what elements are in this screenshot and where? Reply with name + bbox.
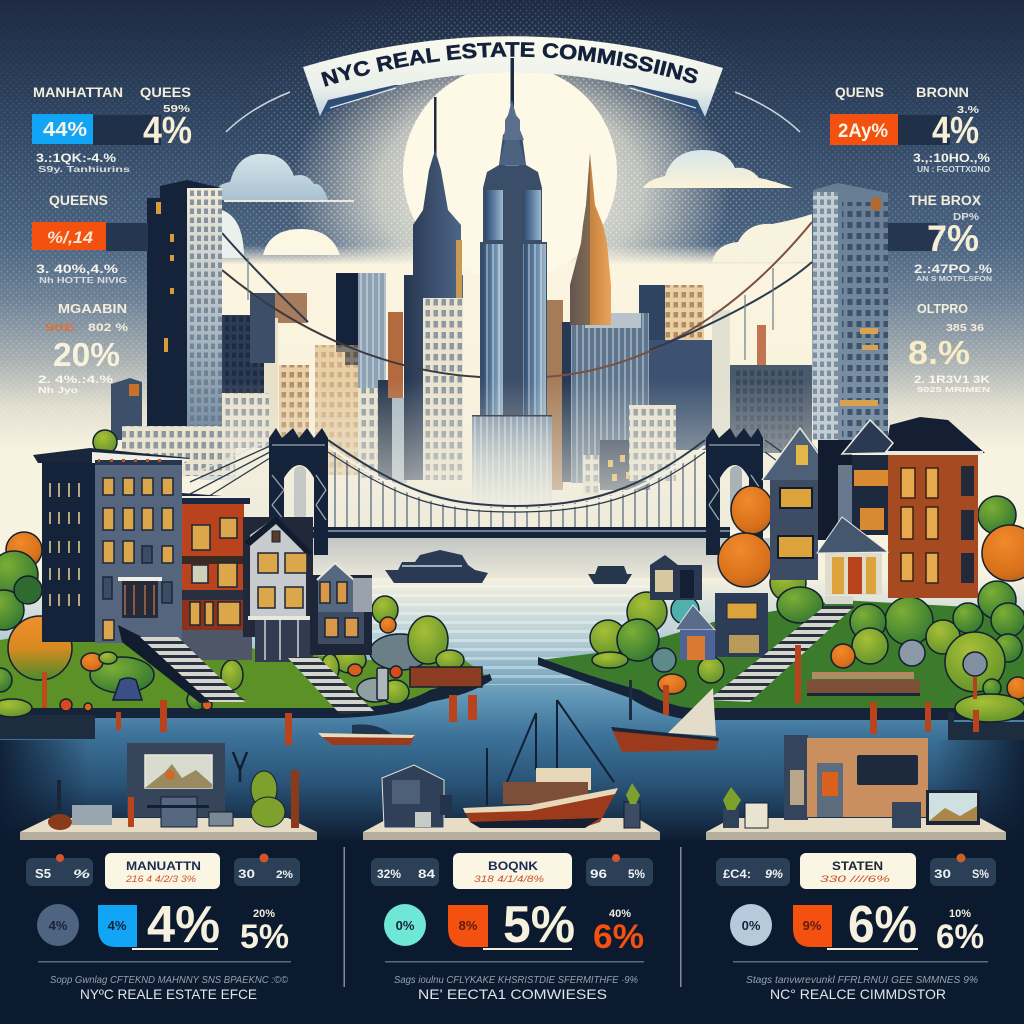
water (0, 578, 1024, 840)
panel: Manhattan: 5% (240, 918, 289, 956)
top-right stats: THE BROX (909, 193, 981, 208)
panel: Staten (680, 847, 996, 1002)
stat chip left (716, 858, 790, 886)
top-right stats: OLTPRO (917, 301, 968, 316)
top-right stats: AN S MOTFLSFON (916, 274, 992, 283)
panel: Bronx: 6% (593, 918, 644, 956)
stat chip left: 32% (377, 867, 401, 881)
left spire tower (404, 97, 463, 480)
panel: Staten: Stags tanvwrevunkl FFRLRNUI GEE SMMNES 9% (746, 974, 978, 986)
borough label card: MANUATTN (126, 859, 201, 873)
shelf right with building (706, 735, 1006, 840)
orange tab: 8% (459, 918, 478, 933)
right houses (650, 417, 985, 702)
top-left stats: 90E (45, 322, 75, 334)
top-left stats: QUEENS (49, 193, 108, 208)
bar: Manhattan (32, 114, 161, 145)
top-left stats: MGAABIN (58, 301, 127, 316)
empire state spire (499, 58, 526, 166)
small house one (650, 555, 702, 600)
left island (0, 620, 492, 739)
shelf middle with boat (363, 700, 660, 840)
panel: Bronx (344, 847, 653, 1002)
stat chip right: S% (972, 867, 989, 881)
blue tab (98, 905, 137, 947)
circle stat: 4% (49, 918, 68, 933)
banner title text: NYC REAL ESTATE COMMISSIINS (321, 42, 698, 87)
stat chip right: 2% (276, 869, 293, 881)
bar: Queens (32, 222, 148, 251)
orange tab (793, 905, 832, 947)
right island (538, 600, 1024, 740)
top-right stats: 5025 MRIMEN (917, 385, 990, 394)
panel: Bronx: Sags ioulnu CFLYKAKE KHSRISTDIE SFERMITHFE ·9% (394, 974, 638, 986)
left dark tower (147, 180, 222, 440)
top-right stats: 3.,:10HO.,% (913, 151, 990, 165)
top-left stats: 802 % (88, 322, 128, 334)
bench (807, 672, 920, 696)
sailboat (611, 688, 719, 752)
panel: Staten: NC° REALCE CIMMDSTOR (770, 986, 946, 1002)
small house two (675, 593, 768, 660)
shelf left with objects (20, 743, 317, 840)
water darkening right (934, 740, 1024, 840)
stat chip right (930, 854, 996, 886)
blue tab: 4% (108, 918, 127, 933)
bar: Queens right: 2Ay% (838, 121, 888, 142)
borough label card: 330 ////6% (820, 874, 890, 884)
stairs one (118, 625, 245, 703)
top-right stats: 8.% (908, 334, 970, 371)
cream sky behind skyline (222, 245, 812, 525)
circle stat (384, 904, 426, 946)
stat chip right (586, 854, 653, 886)
top-left stats (32, 85, 192, 395)
top-left stats: 4% (143, 110, 192, 152)
small boat (318, 724, 415, 745)
small left tower (111, 378, 235, 476)
panel: Manhattan: 20% (253, 908, 275, 920)
trees right (590, 486, 1024, 722)
ferries (385, 550, 632, 584)
stat chip right (234, 854, 300, 886)
stat chip right: 30 (934, 867, 951, 881)
top-right stats: 4% (932, 110, 979, 152)
bridge (190, 428, 800, 580)
suspension cables upper (222, 222, 812, 377)
orange spire tower (570, 153, 611, 325)
top-right stats: 2.:47PO .% (914, 262, 992, 276)
top-left stats: S9y. Tanhiurins (38, 164, 130, 174)
trees left (0, 430, 482, 717)
title banner (303, 36, 723, 117)
right tower (813, 183, 888, 440)
left brownstones (33, 448, 375, 714)
water ripples (370, 585, 660, 685)
stat chip right: 30 (238, 867, 255, 881)
stat chip left: 9% (765, 867, 783, 881)
stat chip left: £C4: (723, 867, 751, 881)
circle stat (730, 904, 772, 946)
stairs two (287, 657, 375, 714)
top-left stats: 3. 40%,4.% (36, 262, 118, 276)
stat chip left: % (73, 867, 91, 881)
circle stat: 0% (742, 918, 761, 933)
top-right stats: 7% (927, 218, 979, 259)
halftone texture (0, 46, 1024, 410)
posts (42, 645, 979, 745)
grey-white house (243, 516, 318, 662)
circle stat (37, 904, 79, 946)
brick mansion (842, 417, 985, 598)
top-right stats: UN : FGOTTXONO (917, 165, 990, 174)
panel: Staten: 6% (936, 918, 984, 956)
top-right stats: 385 36 (946, 322, 984, 334)
dark apartment building (33, 448, 190, 643)
clouds (214, 150, 812, 262)
top-right stats: 2. 1R3V1 3K (914, 374, 990, 386)
background skyline (200, 273, 812, 495)
panel: Manhattan: Sopp Gwnlag CFTEKND MAHNNY SNS BPAEKNC :©© (50, 974, 288, 986)
panel: Manhattan: NYºC REALE ESTATE EFCE (80, 986, 257, 1002)
top-left stats: Nh HOTTE NIVIG (39, 275, 128, 285)
panel: Bronx: NE' EECTA1 COMWIESES (418, 986, 607, 1002)
grey gabled house (762, 428, 852, 580)
sun (403, 65, 617, 279)
panel: Staten: 6% (848, 896, 917, 954)
top-right stats (830, 85, 992, 394)
bar: Bronx (888, 223, 938, 251)
stat chip right: 5% (628, 867, 645, 881)
panel: Bronx: 5% (503, 896, 575, 954)
top-right stats: 3.% (957, 105, 979, 116)
borough label card (105, 853, 220, 889)
stat chip left (26, 854, 93, 886)
top-left stats: Nh Jyo (38, 386, 78, 395)
dark posts (629, 680, 954, 740)
stairs right (708, 606, 855, 702)
stat chip left: 84 (418, 867, 435, 881)
water darkening left (0, 740, 90, 840)
panel: Bronx: 40% (609, 908, 631, 920)
borough label card: BOQNK (488, 859, 538, 873)
empire state tower (472, 125, 552, 505)
borough label card: 318 4/1/4/8% (474, 874, 544, 884)
orange tab: 9% (803, 918, 822, 933)
bar: Manhattan: 44% (43, 119, 87, 141)
stat chip left (371, 858, 439, 886)
orange tab (448, 905, 488, 947)
stat chip left: S5 (35, 866, 51, 881)
top-left stats: 20% (53, 336, 120, 373)
borough label card: 216 4 4/2/3 3% (125, 874, 196, 884)
panel: Manhattan: 4% (147, 896, 220, 954)
panel: Staten: 10% (949, 908, 971, 920)
sky background (0, 0, 1024, 600)
borough label card (800, 853, 916, 889)
bar: Queens: %/,14 (47, 228, 94, 247)
bar: Queens right (830, 114, 950, 145)
top-left stats: 59% (163, 104, 190, 115)
red brick building (182, 493, 252, 660)
decorative sky arcs (226, 92, 800, 132)
porch house (817, 517, 888, 604)
sun halo (242, 0, 779, 257)
borough label card (453, 853, 572, 889)
stat chip right: 96 (590, 867, 607, 881)
stairs one treads (140, 637, 245, 702)
bottom dark panel (0, 840, 1024, 1024)
circle stat: 0% (396, 918, 415, 933)
top-right stats: QUENS (835, 85, 884, 100)
top-right stats: BRONN (916, 85, 969, 100)
panel: Manhattan (26, 853, 300, 1002)
side house (310, 563, 372, 655)
top-left stats: QUEES (140, 85, 191, 100)
top-right stats: DP% (953, 212, 979, 223)
borough label card: STATEN (832, 859, 883, 873)
top-left stats: MANHATTAN (33, 85, 123, 100)
top-left stats: 3.:1QK:-4.% (36, 153, 116, 165)
skyline mist (222, 380, 812, 530)
glow behind sun (290, 30, 730, 350)
top-left stats: 2. 4%.:4.% (38, 374, 113, 386)
